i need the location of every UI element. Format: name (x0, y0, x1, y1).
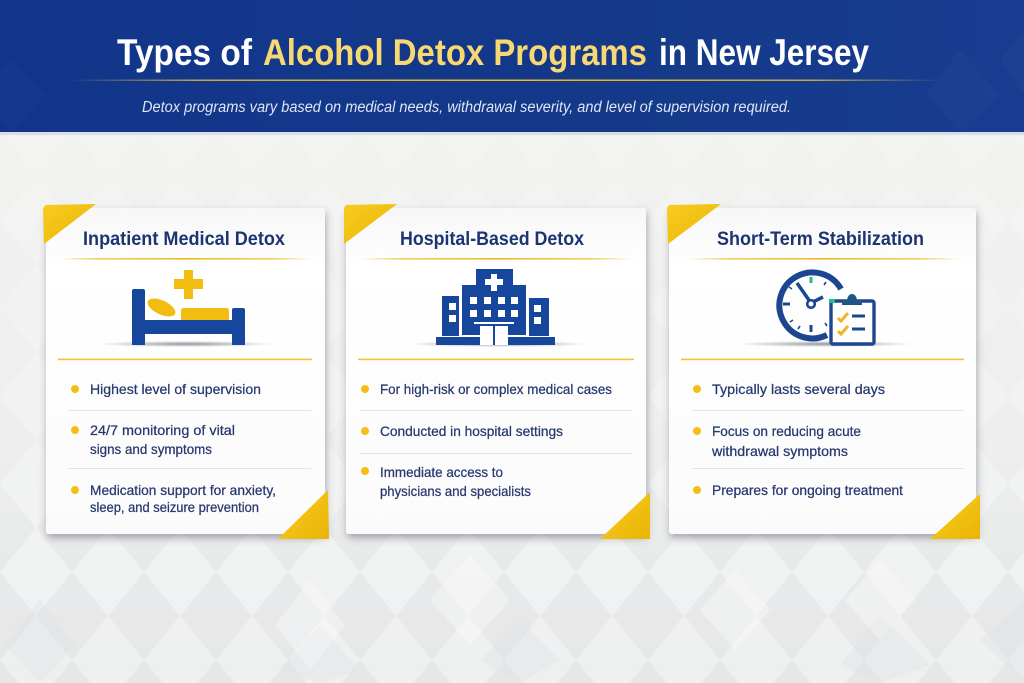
header banner (0, 0, 1024, 135)
title: in New Jersey (659, 32, 869, 73)
bullet list: Immediate access to (380, 464, 503, 480)
bullet list: signs and symptoms (90, 441, 212, 457)
bullet list: 24/7 monitoring of vital (90, 422, 235, 438)
bullet list: Typically lasts several days (712, 381, 885, 397)
bullet list: For high-risk or complex medical cases (380, 381, 612, 397)
heading: Hospital-Based Detox (400, 228, 584, 250)
icon: hospital building (408, 269, 588, 347)
title: Types of (117, 32, 253, 73)
panel: inpatient medical detox (43, 204, 329, 539)
bullet list: sleep, and seizure prevention (90, 499, 259, 515)
bullet list (68, 381, 311, 515)
bullet list (360, 381, 632, 499)
subtitle: Detox programs vary based on medical needs, withdrawal severity, and level of supervision required. (142, 99, 791, 116)
bullet list (692, 381, 964, 498)
heading: Short-Term Stabilization (717, 228, 924, 250)
bullet list: Focus on reducing acute (712, 423, 861, 439)
bullet list: Medication support for anxiety, (90, 482, 276, 498)
heading: Inpatient Medical Detox (83, 228, 285, 250)
bullet list: withdrawal symptoms (711, 443, 848, 459)
panel: hospital-based detox (344, 204, 650, 539)
icon: hospital bed (98, 270, 274, 347)
bullet list: Highest level of supervision (90, 381, 261, 397)
panel: short-term stabilization (667, 204, 980, 539)
icon: clock and clipboard (737, 272, 913, 347)
title (117, 32, 869, 73)
title: Alcohol Detox Programs (263, 32, 647, 73)
bullet list: physicians and specialists (380, 483, 531, 499)
bullet list: Prepares for ongoing treatment (712, 482, 903, 498)
bullet list: Conducted in hospital settings (380, 423, 563, 439)
